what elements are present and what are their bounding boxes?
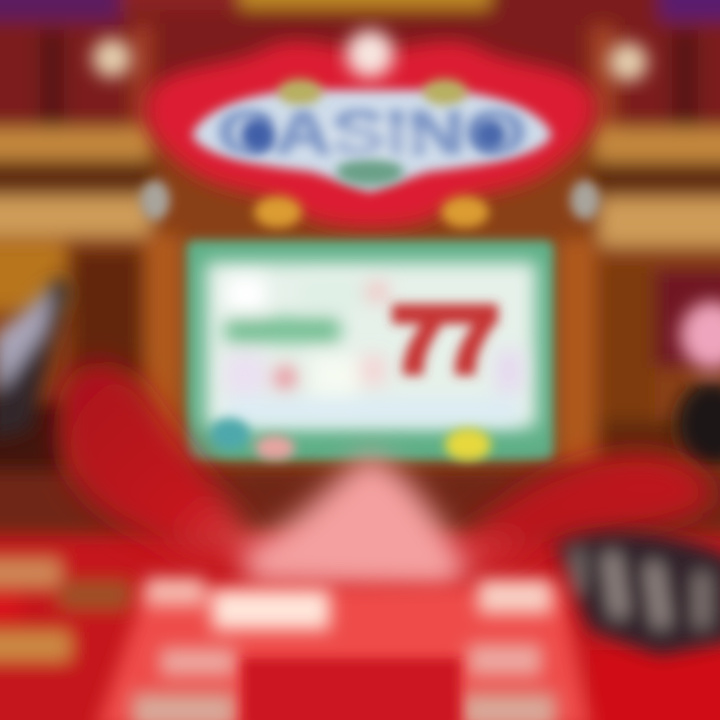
screen tiles — [225, 276, 523, 424]
left red chair — [60, 362, 258, 552]
sign top ornament — [346, 30, 394, 78]
ceiling lights — [92, 38, 648, 82]
table dark red runner — [242, 658, 460, 720]
casino sign — [140, 30, 600, 228]
casino chips stack — [556, 532, 720, 655]
screen bottom buttons — [210, 418, 491, 462]
background: casino hall wall — [0, 0, 720, 479]
table — [95, 578, 592, 720]
sign inner panel — [192, 90, 552, 192]
bottle at left — [0, 275, 72, 440]
sign red frame — [146, 41, 595, 228]
sign lettering: CASINO — [217, 99, 527, 166]
screen display — [206, 262, 536, 427]
table white squares — [132, 578, 556, 720]
screen green frame — [186, 240, 554, 462]
floor and carpet — [0, 470, 720, 720]
table red top — [95, 585, 592, 720]
dark figure at right — [676, 301, 720, 469]
sign accent circles — [241, 118, 506, 160]
sign yellow bulbs — [140, 79, 600, 228]
slot machine screen — [186, 240, 554, 462]
lucky sevens: 77 — [393, 292, 497, 392]
right red chair — [458, 452, 712, 566]
centre pink drape — [240, 455, 468, 590]
